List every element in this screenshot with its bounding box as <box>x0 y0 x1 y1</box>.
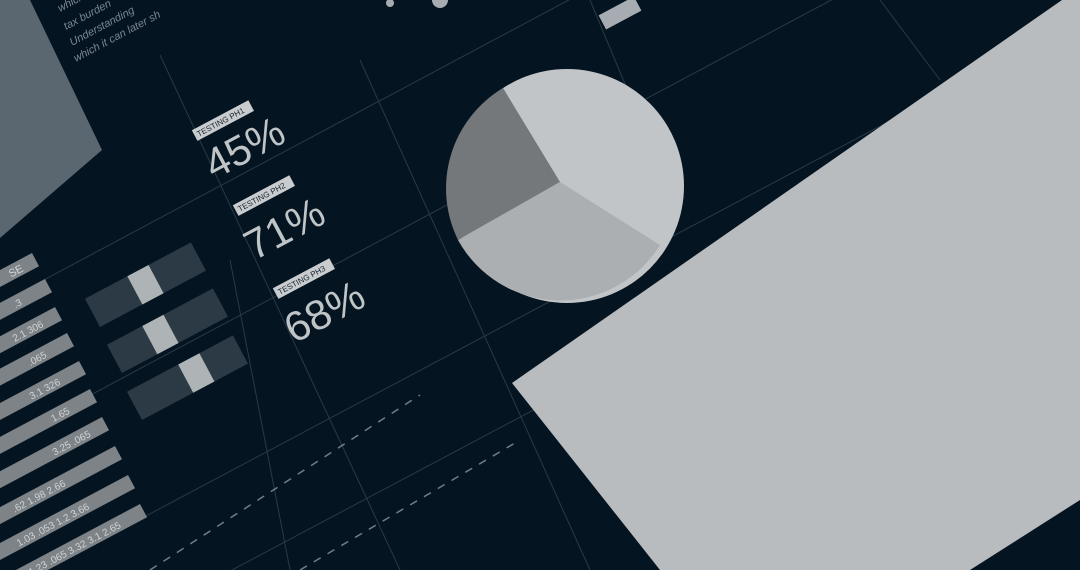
panel: left gray block <box>0 0 102 238</box>
chart: left data bars: 3.25 .065 <box>51 429 93 458</box>
chart: left data bars: 2.1 306 <box>11 319 46 345</box>
text block: testing percentages: 45% <box>196 107 292 188</box>
text block: testing percentages: 68% <box>276 271 372 352</box>
text block: top-left paragraph: which it can later sh <box>72 9 163 65</box>
chart: left data bars: SE <box>7 263 26 280</box>
chart: left data bars: 1.03 .053 1.2 3.66 <box>15 502 92 549</box>
decorative blurred photo bits <box>386 0 641 29</box>
text block: testing percentages: TESTING PH2 <box>236 181 287 214</box>
chart: left data bars: .3 <box>12 297 24 311</box>
chart: pie <box>446 69 684 303</box>
text block: testing percentages: 71% <box>236 188 332 269</box>
text block: testing percentages <box>192 100 372 352</box>
chart: left data bars <box>0 253 147 570</box>
text block: testing percentages: TESTING PH1 <box>195 106 246 139</box>
text block: top-left paragraph: Understanding <box>68 4 137 49</box>
chart: left data bars: 1.65 <box>49 406 72 425</box>
chart: left data bars: 3.1 326 <box>28 377 63 402</box>
text block: testing percentages: TESTING PH3 <box>276 264 327 297</box>
chart: striped bars <box>85 242 248 420</box>
panel: large light rectangle <box>512 0 1080 570</box>
chart: left data bars: .065 <box>26 350 49 369</box>
chart: left data bars: .62 1.98 2.66 <box>11 478 68 516</box>
